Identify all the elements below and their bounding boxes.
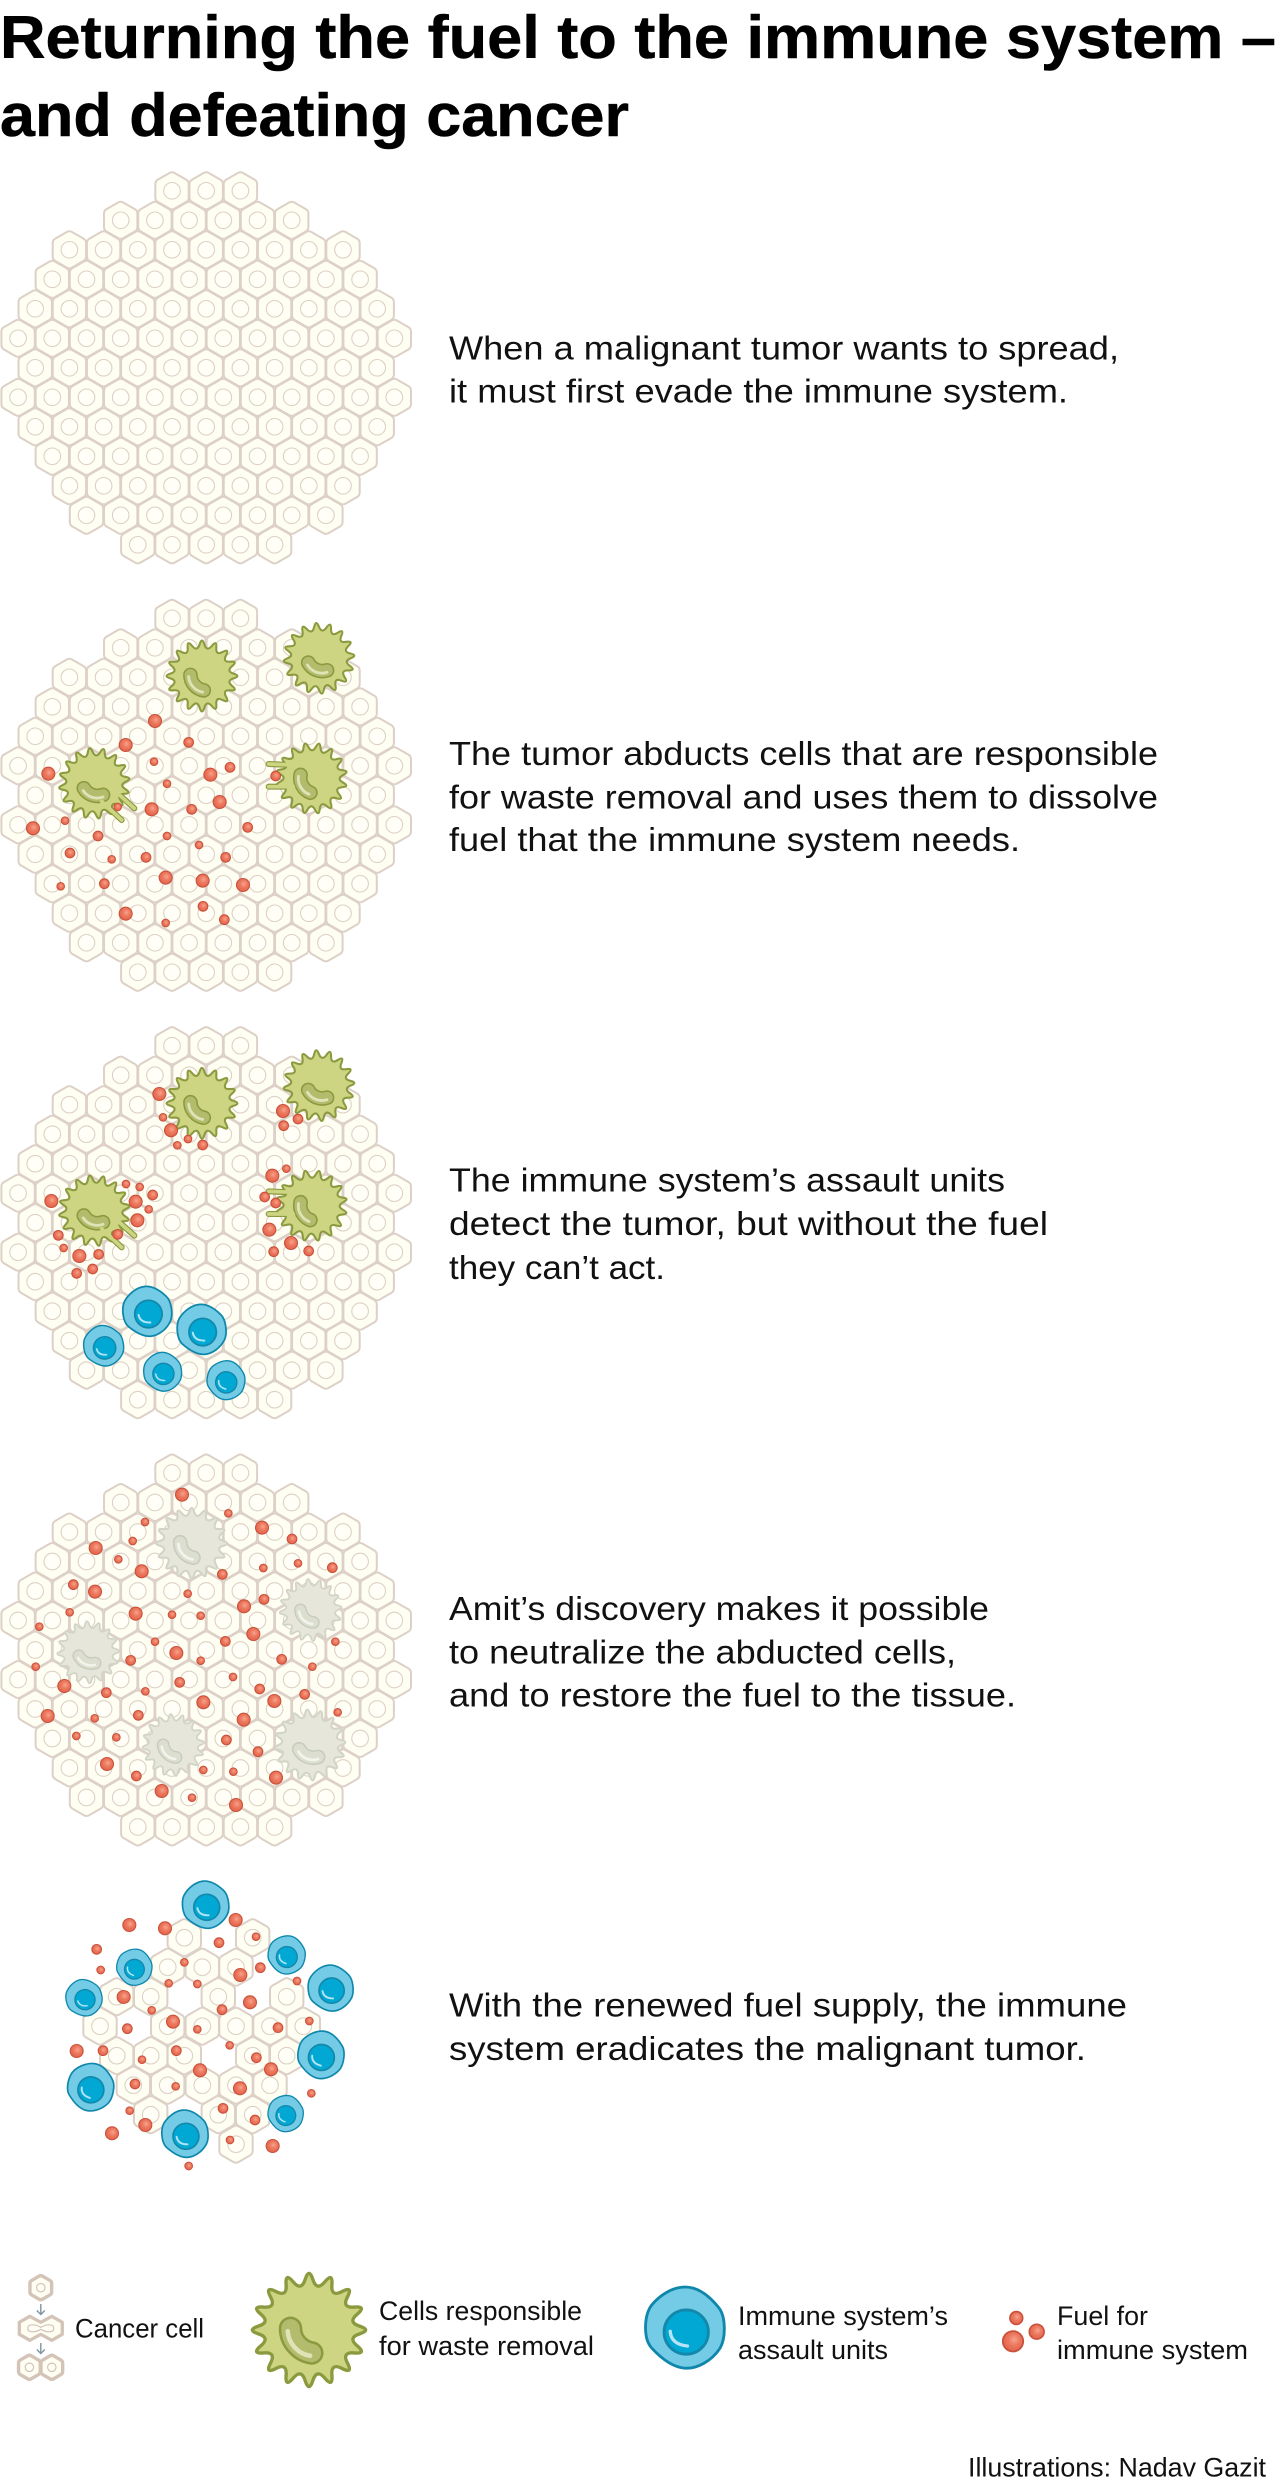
caption: The tumor abducts cells that are responsible <box>449 736 1158 773</box>
label: for waste removal <box>379 2331 594 2361</box>
caption <box>449 736 1158 859</box>
panel: tumor evades the immune system <box>1 172 1119 563</box>
label: Immune system’s <box>738 2301 948 2331</box>
legend <box>19 2273 1248 2387</box>
label <box>1057 2301 1248 2365</box>
label: Fuel for <box>1057 2301 1148 2331</box>
caption <box>449 1163 1048 1287</box>
caption: for waste removal and uses them to dissolve <box>449 779 1158 816</box>
legend item: cancer cell <box>19 2276 204 2379</box>
icon: waste-removal cell <box>252 2273 366 2387</box>
icon: assault unit <box>646 2287 724 2368</box>
caption: When a malignant tumor wants to spread, <box>449 330 1119 367</box>
title: and defeating cancer <box>0 82 629 149</box>
legend item: assault units <box>646 2287 948 2368</box>
caption: Amit’s discovery makes it possible <box>449 1591 989 1628</box>
credit: Illustrations: Nadav Gazit <box>968 2453 1267 2483</box>
label <box>379 2296 594 2361</box>
legend item: fuel <box>1003 2301 1248 2365</box>
abducted cells, displaced fuel and assault units <box>45 1038 367 1403</box>
caption: fuel that the immune system needs. <box>449 822 1020 859</box>
label: immune system <box>1057 2335 1248 2365</box>
label <box>738 2301 948 2365</box>
abducted waste-removal cells and fuel <box>26 611 367 927</box>
neutralized cells and restored fuel <box>32 1488 358 1811</box>
caption: and to restore the fuel to the tissue. <box>449 1678 1016 1715</box>
assault units and fuel <box>62 1878 355 2170</box>
panel: assault units detect the tumor <box>1 1027 1048 1418</box>
caption: it must first evade the immune system. <box>449 374 1068 411</box>
cancer cell cluster <box>1 172 411 563</box>
cancer cell cluster <box>1 1027 411 1418</box>
caption: to neutralize the abducted cells, <box>449 1634 956 1671</box>
caption: detect the tumor, but without the fuel <box>449 1206 1048 1243</box>
caption: system eradicates the malignant tumor. <box>449 2031 1086 2068</box>
label: Cancer cell <box>75 2313 204 2343</box>
icon: fuel drops <box>1003 2312 1044 2352</box>
title: Returning the fuel to the immune system – <box>0 4 1276 71</box>
cancer cell cluster <box>1 1454 411 1846</box>
label: assault units <box>738 2335 888 2365</box>
title <box>0 4 1276 149</box>
caption: With the renewed fuel supply, the immune <box>449 1988 1127 2025</box>
panel: tumor abducts waste-removal cells <box>1 600 1158 991</box>
icon: dividing cancer cell <box>19 2276 63 2379</box>
legend item: waste-removal cells <box>252 2273 594 2387</box>
caption <box>449 1591 1016 1715</box>
remaining cancer cells <box>83 1919 320 2163</box>
panel: abducted cells neutralized, fuel restored <box>1 1454 1016 1846</box>
label: Cells responsible <box>379 2296 582 2326</box>
caption: they can’t act. <box>449 1250 665 1287</box>
cancer cell cluster <box>1 600 411 991</box>
panel: immune system eradicates the tumor <box>62 1878 1127 2170</box>
caption: The immune system’s assault units <box>449 1163 1005 1200</box>
caption <box>449 1988 1127 2068</box>
caption <box>449 330 1119 411</box>
